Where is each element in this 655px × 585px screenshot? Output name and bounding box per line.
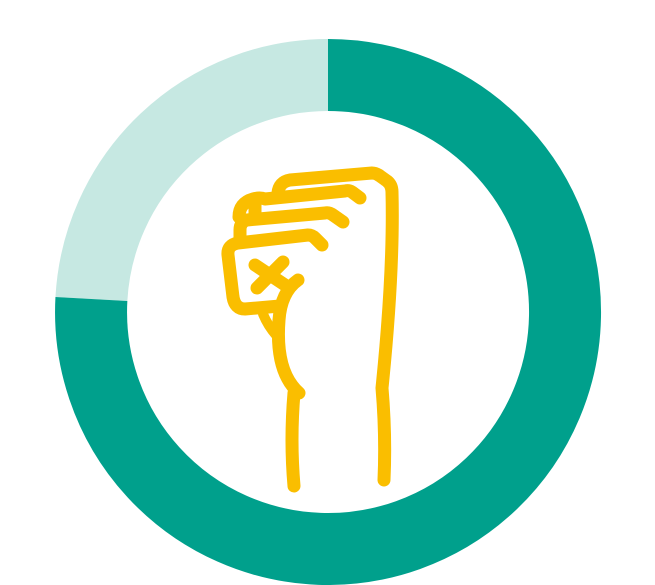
thumb and inner wrist <box>278 280 299 393</box>
card outline <box>228 235 322 309</box>
icon: raised fist holding card <box>228 173 392 486</box>
inner forearm <box>292 393 294 486</box>
x mark <box>255 262 285 288</box>
donut segment: light remainder <box>91 75 328 299</box>
second finger <box>239 191 360 217</box>
donut chart <box>91 75 565 549</box>
thumb base <box>263 314 276 335</box>
top finger and outer forearm <box>278 173 392 480</box>
donut segment: dark majority <box>91 75 565 549</box>
third finger <box>240 213 343 238</box>
